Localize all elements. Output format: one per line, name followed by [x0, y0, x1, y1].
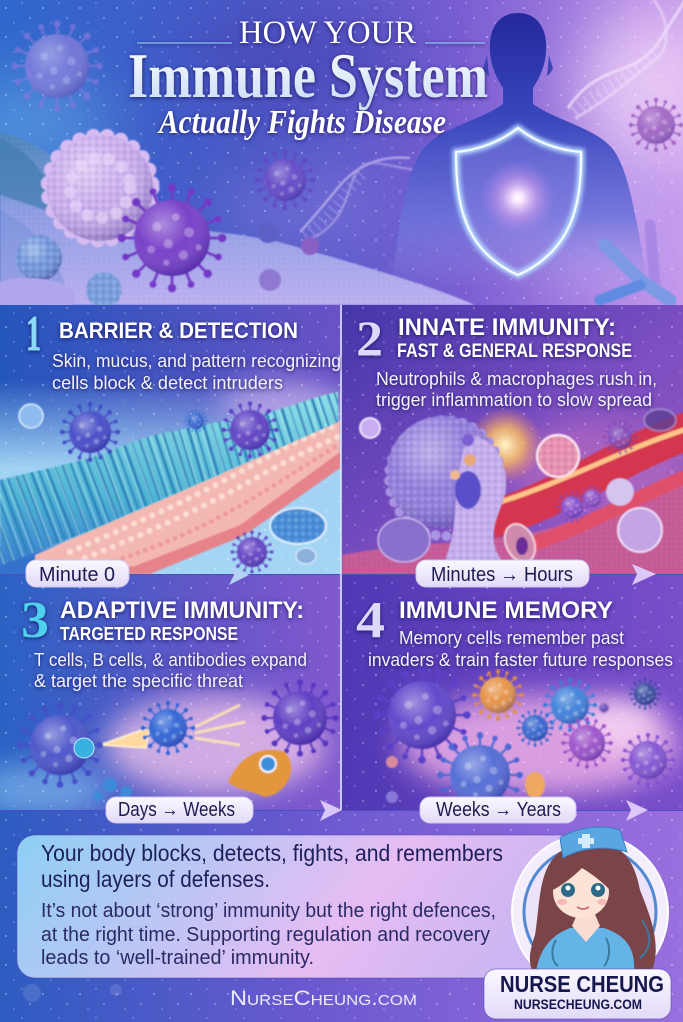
- badge: nurse cheung: [484, 969, 671, 1019]
- heading: immune memory: IMMUNE MEMORY: [399, 597, 613, 624]
- divider: panel separators: [340, 305, 342, 810]
- text: innate description: Neutrophils & macrophages rush in,: [376, 368, 657, 389]
- text: summary body: leads to ‘well-trained’ immunity.: [41, 947, 314, 969]
- badge: nurse cheung: NURSECHEUNG.COM: [514, 997, 642, 1012]
- text: summary headline: Your body blocks, detects, fights, and remembers: [41, 840, 503, 866]
- timeline: upper arrow axis: [0, 564, 683, 585]
- icon: orange B cell: [228, 750, 291, 797]
- text: barrier description: [52, 350, 341, 393]
- subheading: targeted response: TARGETED RESPONSE: [60, 623, 238, 644]
- icon: purple virus: [118, 184, 226, 292]
- icon: glowing shield: [456, 128, 581, 275]
- text: innate description: trigger inflammation to slow spread: [376, 389, 652, 410]
- text: summary body: [41, 900, 496, 969]
- number 1: 1: [26, 305, 41, 361]
- icon: DNA strand upper right: [568, 0, 683, 118]
- number 3: 3: [21, 592, 49, 649]
- icon: purple virus target: [261, 679, 339, 757]
- icon: human silhouette: [393, 13, 645, 275]
- text: innate description: [376, 368, 657, 410]
- icon: blood vessel: [342, 428, 683, 580]
- pill: minutes to hours: Minutes → Hours: [431, 563, 573, 586]
- heading: actually fights disease: Actually Fights Disease: [157, 104, 446, 141]
- text: memory description: [368, 627, 673, 670]
- text: adaptive description: & target the specific threat: [34, 670, 243, 691]
- label group: step 3 text: [21, 592, 307, 691]
- icon: small tissue spheres: [258, 223, 319, 291]
- pill: minute 0: [26, 560, 129, 587]
- panel: bottom band background: [0, 811, 683, 1022]
- panel: tissue terrain: [0, 132, 475, 318]
- icon: light beam: [100, 705, 245, 748]
- pill: minute 0: Minute 0: [39, 563, 115, 586]
- panel: step 1 barrier and detection: [0, 305, 340, 574]
- icon: nurse avatar: [512, 827, 668, 990]
- icon: memory cells group: [373, 666, 675, 818]
- label group: step 1 text: [26, 305, 341, 393]
- panel: hero header: [0, 0, 683, 318]
- pill: weeks to years: Weeks → Years: [436, 798, 561, 821]
- label group: step 2 text: [356, 310, 657, 410]
- heading: how your: HOW YOUR: [239, 15, 416, 51]
- subheading: fast and general: FAST & GENERAL RESPONSE: [397, 341, 632, 362]
- heading: innate immunity: INNATE IMMUNITY:: [398, 314, 616, 341]
- text: barrier description: cells block & detect intruders: [52, 372, 283, 393]
- icon: large blue virus: [17, 702, 103, 788]
- icon: macrophage: [387, 416, 506, 565]
- text: summary headline: using layers of defenses.: [41, 866, 270, 892]
- number 2: 2: [356, 310, 383, 366]
- icon: cyan nucleus: [74, 738, 94, 758]
- number 4: 4: [356, 592, 385, 649]
- icon: pink tissue band: [35, 420, 340, 574]
- heading: barrier and detection: BARRIER & DETECTION: [59, 318, 298, 343]
- icon: large lilac immune cell: [47, 135, 153, 241]
- pill: days to weeks: Days → Weeks: [118, 798, 235, 821]
- icon: small virus right: [629, 98, 683, 152]
- panel: step 2 innate immunity: [342, 305, 683, 580]
- icon: small virus centre: [255, 150, 315, 210]
- label group: step 4 text: [356, 592, 673, 670]
- icon: faint virus top left: [11, 20, 103, 112]
- icon: viruses and cells: [19, 401, 326, 573]
- text: adaptive description: [34, 649, 307, 691]
- text: memory description: Memory cells remember past: [399, 627, 624, 648]
- text: memory description: invaders & train faster future responses: [368, 649, 673, 670]
- panel: step 4 immune memory: [342, 575, 683, 818]
- text: summary headline: [41, 840, 503, 892]
- icon: surrounding cells: [360, 409, 676, 567]
- website footer: NurseCheung.com: [230, 987, 417, 1010]
- text: adaptive description: T cells, B cells, & antibodies expand: [34, 649, 307, 670]
- panel: step 3 adaptive immunity: [0, 575, 341, 816]
- text: summary body: It’s not about ‘strong’ immunity but the right defences,: [41, 900, 496, 922]
- icon: T cell: [141, 701, 195, 755]
- text: summary body: at the right time. Supporting regulation and recovery: [41, 924, 490, 946]
- heading: immune system: Immune System: [128, 41, 488, 111]
- text: barrier description: Skin, mucus, and pattern recognizing: [52, 350, 341, 371]
- timeline: lower arrow axis: [0, 800, 683, 821]
- icon: small spheres: [93, 778, 132, 801]
- title: [128, 15, 488, 141]
- icon: antibody shapes: [600, 225, 670, 300]
- icon: cilia band: [0, 392, 345, 566]
- heading: adaptive immunity: ADAPTIVE IMMUNITY:: [60, 597, 304, 624]
- badge: nurse cheung: NURSE CHEUNG: [500, 971, 664, 997]
- icon: glow burst: [476, 408, 540, 481]
- icon: DNA strand lower centre: [300, 158, 415, 240]
- callout: summary box: [17, 835, 577, 978]
